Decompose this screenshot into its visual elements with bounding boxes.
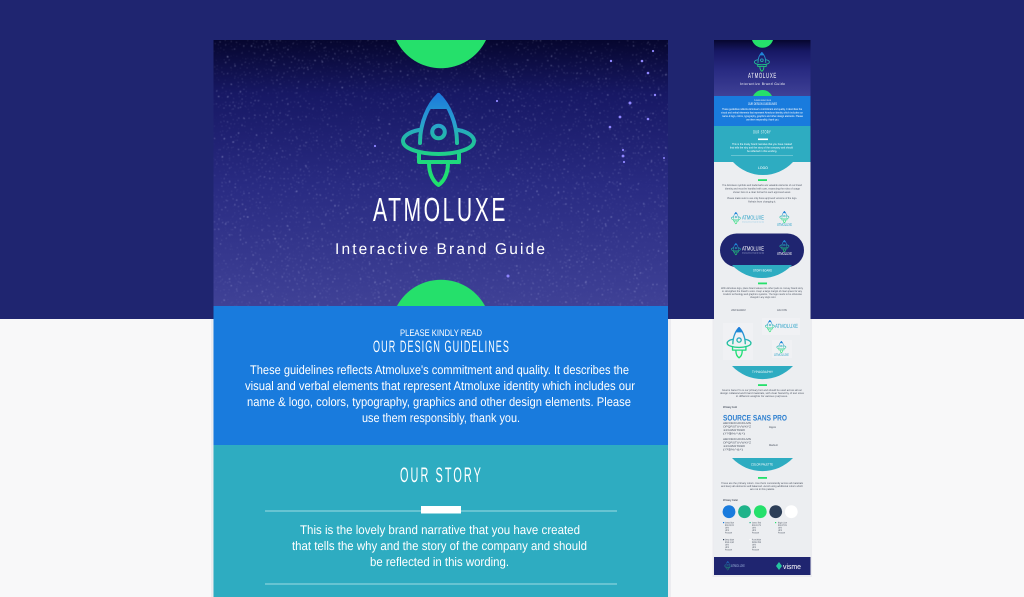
logo: stacked on light: ATMOLUXE: [777, 222, 792, 227]
thumbnail typography section: 1234567890: [723, 445, 746, 448]
thumbnail logo elements: ATMOLUXE: [775, 323, 798, 330]
color specifications: RGB 37,224: [778, 524, 788, 527]
thumbnail typography section: SOURCE SANS PRO: [723, 414, 787, 422]
heading: OUR STORY: [400, 464, 483, 487]
color swatches: [723, 505, 798, 518]
thumbnail logo section: identity and must be handled with care, respecting the rules of usage: [725, 188, 801, 190]
thumbnail story: [714, 126, 810, 175]
color specifications: CMYK: [752, 526, 756, 530]
side panel: full page thumbnail: [714, 40, 810, 575]
navy logo pill: [720, 234, 804, 267]
thumbnail footer: ATMOLUXE: [731, 563, 745, 568]
color specifications: Pantone: [725, 532, 733, 534]
thumbnail guidelines: use them responsibly, thank you.: [746, 118, 779, 122]
logo: horizontal on light: [731, 212, 764, 224]
thumbnail story: LOGO: [758, 166, 768, 170]
story paragraph: [292, 523, 587, 569]
thumbnail logo elements: [723, 318, 800, 360]
thumbnail hero: Interactive Brand Guide: [740, 82, 785, 86]
logo: horizontal on light: ATMOLUXE: [742, 214, 764, 222]
thumbnail typography section: OPQRSTUVWXYZ: [723, 426, 751, 428]
thumbnail guidelines: PLEASE KINDLY READ: [754, 99, 771, 102]
heading: OUR DESIGN GUIDELINES: [373, 338, 510, 356]
thumbnail typography section: Primary Font: [723, 405, 737, 409]
color specifications: Bright Lime: [778, 522, 788, 524]
color specifications: HEX: [752, 529, 756, 532]
color specifications: HEX: [778, 529, 782, 532]
decorative green half circle: bottom: [397, 280, 485, 306]
thumbnail color section: and keep all elements well balanced. Avoid using additional colors which: [721, 485, 804, 488]
guidelines paragraph: name & logo, colors, typography, graphics and other design elements. Please: [247, 395, 631, 409]
story paragraph: This is the lovely brand narrative that you have created: [300, 523, 580, 537]
thumbnail typography section: (!?$%^&*): [723, 432, 745, 436]
color specifications: Pantone: [752, 548, 760, 552]
subtitle: Interactive Brand Guide: [335, 241, 545, 258]
guidelines paragraph: [245, 363, 635, 425]
thumbnail guidelines: name & logo, colors, typography, graphics and other design elements. Please: [722, 115, 803, 118]
guidelines paragraph: visual and verbal elements that represent Atmoluxe identity which includes our: [245, 379, 635, 393]
thumbnail color section: [721, 458, 804, 552]
thumbnail footer: [714, 557, 810, 575]
thumbnail storyboard section: FAV ICON: [777, 308, 787, 312]
thumbnail color section: are not in this palette.: [750, 488, 775, 491]
guidelines paragraph: use them responsibly, thank you.: [362, 411, 520, 425]
thumbnail typography section: Medium: [769, 444, 779, 447]
thumbnail storyboard section: to strengthen the brand's voice. Keep a large margin of clear space for any: [722, 290, 803, 293]
thumbnail logo section: Please make sure to use only these approved versions of the logo.: [727, 197, 797, 200]
side panel soft edge: [712, 319, 812, 577]
brand name: ATMOLUXE: [373, 192, 508, 229]
color specifications: Pure White: [752, 538, 762, 542]
thumbnail typography section: 1234567890: [723, 429, 746, 432]
logo: horizontal on light: Interactive Brand Guide: [742, 220, 764, 224]
color specifications: [723, 522, 788, 552]
color specifications: HEX: [752, 546, 756, 549]
color specifications: RGB 25,123: [725, 524, 735, 527]
thumbnail typography section: Source Sans Pro is our primary font and should be used across all our: [722, 389, 802, 392]
guidelines paragraph: These guidelines reflects Atmoluxe's commitment and quality. It describes the: [250, 363, 629, 377]
story paragraph: be reflected in this wording.: [370, 555, 509, 569]
eyebrow: PLEASE KINDLY READ: [400, 328, 482, 339]
thumbnail guidelines: [714, 96, 810, 126]
navy logo pill: Interactive Brand Guide: [742, 252, 764, 254]
thumbnail typography section: ABCDEFGHIJKLMN: [723, 438, 751, 441]
thumbnail typography section: [720, 366, 805, 452]
thumbnail storyboard section: STORY BOARD: [753, 268, 773, 272]
thumbnail color section: These are the primary colors. Use them consistently across all materials: [721, 482, 804, 485]
color specifications: HEX: [725, 546, 729, 549]
thumbnail storyboard section: modern technology and graphics systems. The logo needs to be otherwise: [723, 293, 803, 296]
color specifications: Ocean Teal: [752, 522, 761, 524]
thumbnail storyboard section: changed in any single color.: [750, 296, 776, 299]
background: navy upper band: [0, 0, 1024, 319]
thumbnail typography section: design collateral and brand materials, with clear hierarchy of text sizes: [720, 392, 805, 395]
decorative green half circle: top: [396, 40, 486, 68]
color specifications: CMYK: [725, 544, 729, 546]
color specifications: RGB 31,179: [752, 524, 762, 527]
navy logo pill: ATMOLUXE: [777, 251, 792, 256]
color specifications: RGB 255: [752, 541, 762, 544]
color specifications: CMYK: [778, 526, 782, 530]
thumbnail typography section: TYPOGRAPHY: [752, 370, 774, 374]
thumbnail logo section: Refrain from changing it.: [748, 200, 776, 204]
thumbnail hero: [714, 40, 810, 96]
thumbnail guidelines: OUR DESIGN GUIDELINES: [748, 102, 777, 106]
thumbnail storyboard section: With Atmoluxe logo, place brand values into other parts to convey brand story: [721, 287, 804, 290]
color specifications: RGB 44,62: [725, 541, 735, 544]
thumbnail logo elements: ATMOLUXE: [774, 353, 789, 357]
thumbnail story: be reflected in this wording.: [747, 150, 777, 153]
icon: rocket logo: [403, 95, 474, 185]
story paragraph: that tells the why and the story of the company and should: [292, 539, 587, 553]
thumbnail hero: ATMOLUXE: [748, 71, 777, 80]
main panel: brand guide preview: [214, 40, 668, 597]
color specifications: Ocean Blue: [725, 522, 735, 524]
thumbnail storyboard section: [721, 265, 804, 312]
divider with accent: [265, 506, 617, 514]
color specifications: Pantone: [752, 532, 760, 534]
hero: starry sky: [214, 40, 668, 306]
thumbnail typography section: OPQRSTUVWXYZ: [723, 442, 751, 444]
section: design guidelines: [214, 306, 668, 445]
color specifications: CMYK: [725, 526, 729, 530]
color specifications: HEX: [725, 529, 729, 532]
thumbnail footer: visme: [783, 562, 801, 571]
thumbnail color section: Primary Color: [723, 498, 739, 502]
thumbnail logo section: shown here in a clear format for each approved asset.: [733, 191, 791, 194]
color specifications: Pantone: [778, 532, 786, 534]
color specifications: Deep Slate: [725, 538, 735, 542]
color specifications: CMYK: [752, 544, 756, 546]
thumbnail story: This is the lovely brand narrative that you have created: [732, 143, 792, 146]
thumbnail storyboard section: LOGO ELEMENT: [731, 308, 746, 312]
thumbnail color section: COLOR PALETTE: [751, 462, 773, 466]
background: light lower band: [0, 319, 1024, 597]
navy logo pill: ATMOLUXE: [742, 246, 764, 252]
thumbnail typography section: Regular: [769, 426, 776, 429]
main panel soft edge: [211, 319, 671, 597]
thumbnail story: OUR STORY: [753, 130, 771, 134]
thumbnail story: that tells the why and the story of the company and should: [730, 146, 793, 150]
thumbnail typography section: (!?$%^&*): [723, 448, 743, 452]
thumbnail typography section: in different weights for various purposes.: [736, 395, 788, 398]
thumbnail logo section: The Atmoluxe symbols and trademarks are valuable elements of our brand: [722, 184, 803, 187]
section: our story: [214, 445, 668, 597]
thumbnail logo section: [720, 179, 804, 267]
color specifications: Pantone: [725, 548, 733, 552]
thumbnail guidelines: visual and verbal elements that represent Atmoluxe identity which includes our: [721, 112, 803, 114]
thumbnail guidelines: These guidelines reflects Atmoluxe's commitment and quality. It describes the: [722, 108, 802, 111]
thumbnail typography section: ABCDEFGHIJKLMN: [723, 422, 751, 425]
